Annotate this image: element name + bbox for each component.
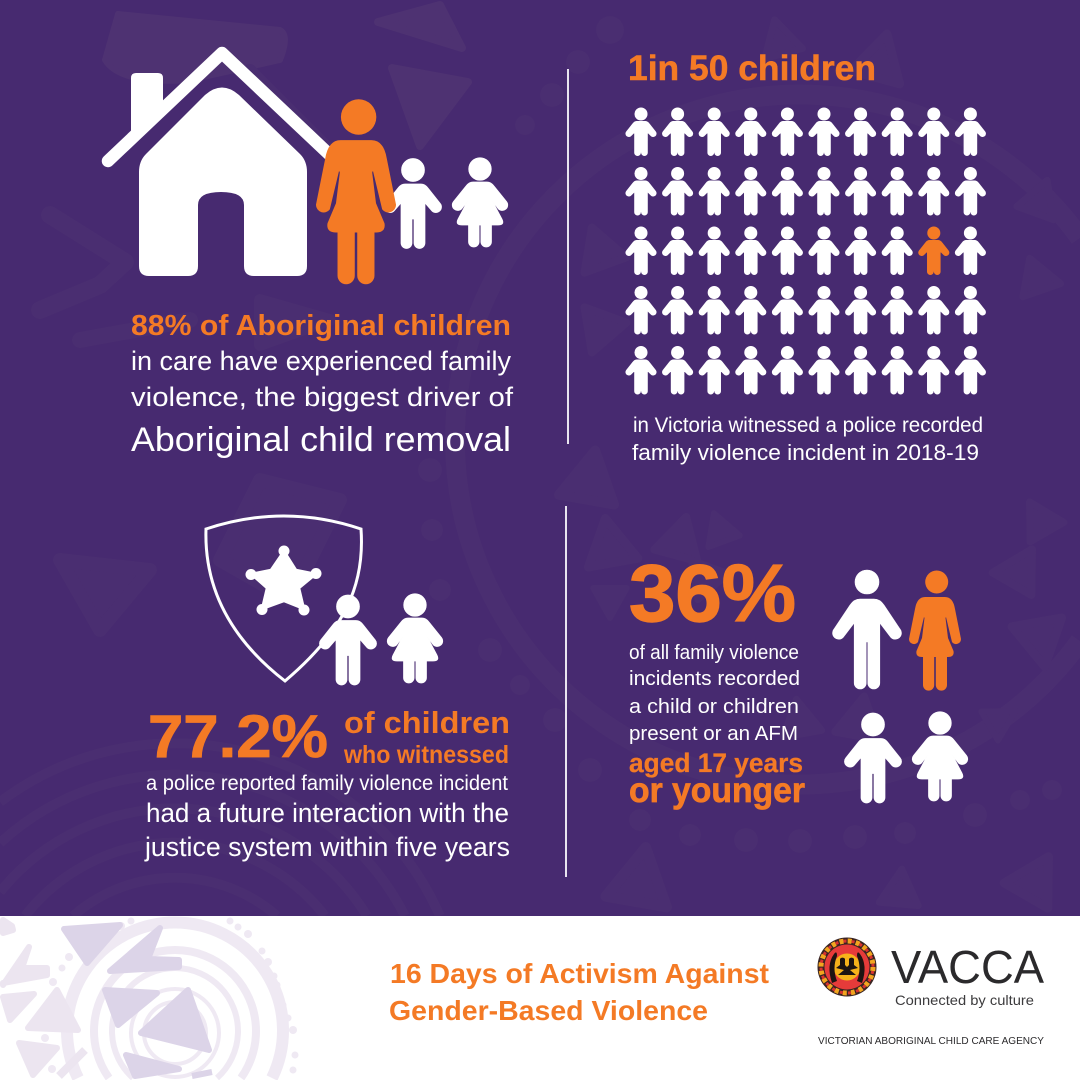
icon: girl [387,594,443,683]
icon: star badge [246,546,322,616]
text: 88 percent statistic: Aboriginal child removal [131,421,511,459]
text: 77.2 percent statistic: who witnessed [343,741,509,769]
text: 36 percent statistic: aged 17 years [629,748,803,778]
icon: boy [844,713,902,803]
text: Victoria statistic: family violence incident in 2018-19 [632,440,979,465]
divider: top [567,69,569,444]
footer heading [389,958,769,1026]
text: 88 percent statistic: in care have experienced family [131,346,511,376]
text: 77.2 percent statistic: of children [344,705,510,740]
text: 77.2 percent statistic: a police reported family violence incident [146,772,508,795]
text: Victoria statistic: in Victoria witnessed a police recorded [633,414,983,437]
text: 77.2 percent statistic [144,703,510,862]
icon: house with mother and children [108,53,508,284]
footer concentric motif [3,918,298,1078]
text: 77.2 percent statistic: 77.2% [148,703,328,770]
icon: boy [319,595,377,685]
text: 36 percent statistic: of all family violence [629,642,799,664]
text: 77.2 percent statistic: had a future interaction with the [146,798,509,828]
footer heading: 16 Days of Activism Against [390,958,769,989]
text: 88 percent statistic: violence, the biggest driver of [131,382,514,412]
lower-left concentric rings [0,743,440,916]
icon grid: 50 children [626,108,986,394]
text: 36 percent statistic: incidents recorded [629,668,800,690]
icon: shield with star and children [206,516,443,685]
large right motif [455,95,1080,785]
icon: adult man [833,570,901,689]
text: 88 percent statistic: 88% of Aboriginal children [131,310,511,342]
icon: family of four [833,570,968,803]
text: 36 percent statistic: 36% [629,549,796,639]
wordmark: VACCA: Connected by culture [895,992,1034,1008]
footer heading: Gender-Based Violence [389,995,708,1026]
icon: VACCA logo [818,938,876,996]
icon: adult woman [909,570,961,691]
wordmark: VACCA [818,941,1044,1047]
text: 88 percent statistic [131,310,514,459]
icon: girl [912,712,968,801]
text: 36 percent statistic: present or an AFM [629,723,798,745]
icon: boy [384,158,442,248]
icon: mother [316,99,396,284]
text: Victoria statistic [632,414,983,465]
text: 36 percent statistic: or younger [629,771,805,810]
divider: bottom [565,506,567,877]
icon: shield [206,516,361,681]
panel: white footer [0,916,1080,1080]
icon: girl [452,158,508,247]
icon: house [108,53,332,276]
wordmark: VACCA: VACCA [891,941,1044,993]
heading: 1 in 50 children: 1in 50 children [628,49,876,88]
text: 36 percent statistic: a child or children [629,696,799,718]
text: 36 percent statistic [629,549,805,810]
text: 77.2 percent statistic: justice system within five years [144,832,510,862]
wordmark: VACCA: VICTORIAN ABORIGINAL CHILD CARE AGENCY [818,1036,1044,1047]
